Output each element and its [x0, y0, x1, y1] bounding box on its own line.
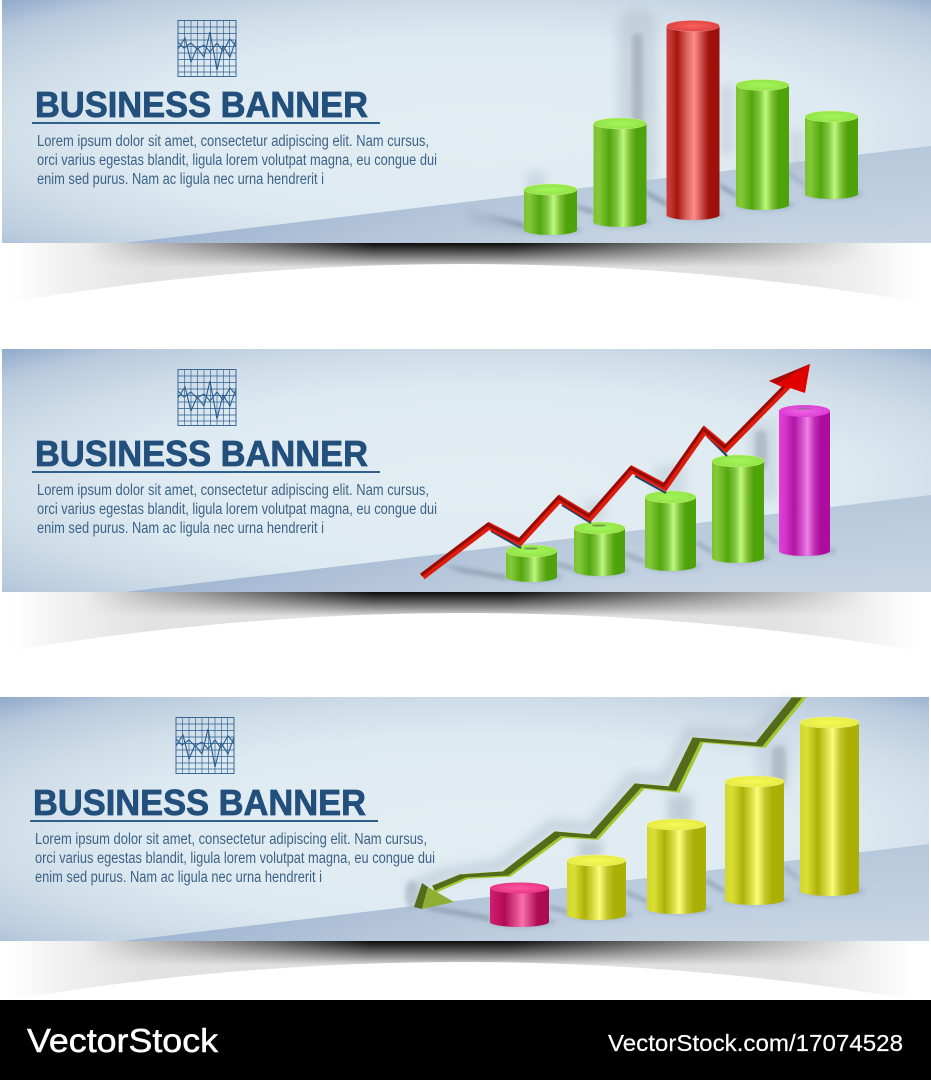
banner 3 drop shadow: [38, 941, 886, 995]
bar 4 green: [712, 455, 770, 564]
footer bar: [0, 1000, 931, 1080]
bar 2 green: [592, 118, 652, 228]
body text: enim sed purus. Nam ac ligula nec urna hendrerit i: [35, 869, 322, 886]
banner 1 background: [2, 0, 931, 243]
banner 3 cast shadows: [405, 700, 800, 921]
body text: [35, 831, 435, 886]
body text: orci varius egestas blandit, ligula lorem volutpat magna, eu congue dui: [37, 501, 437, 518]
body text: enim sed purus. Nam ac ligula nec urna hendrerit i: [37, 171, 324, 188]
banner 1 drop shadow: [40, 243, 888, 297]
banner 3 floor: [123, 844, 929, 941]
bar 2 yellow: [565, 855, 633, 921]
VectorStock logo: VectorStock: [27, 1022, 219, 1059]
bar 3 green: [644, 491, 702, 572]
green arrow pointing down-left: [414, 698, 805, 909]
heading: BUSINESS BANNER: [35, 433, 368, 474]
chart icon: [178, 20, 236, 76]
bar 1 green: [522, 184, 582, 236]
red rising arrow: [421, 364, 810, 576]
banner 3: [0, 697, 929, 1000]
body text: Lorem ipsum dolor sit amet, consectetur adipiscing elit. Nam cursus,: [35, 831, 427, 848]
bar 3 yellow: [645, 819, 713, 915]
body text: Lorem ipsum dolor sit amet, consectetur adipiscing elit. Nam cursus,: [37, 133, 429, 150]
banner 2 floor: [125, 495, 931, 592]
banner 1 cast shadows: [466, 10, 806, 232]
bar 1 green: [505, 545, 563, 583]
bar 5 green: [804, 111, 864, 200]
heading underline: [30, 820, 378, 822]
heading underline: [32, 471, 380, 473]
body text: [37, 133, 437, 188]
body text: Lorem ipsum dolor sit amet, consectetur adipiscing elit. Nam cursus,: [37, 482, 429, 499]
chart icon: [176, 718, 234, 774]
banner 2 cast shadows: [445, 420, 779, 580]
heading underline: [32, 122, 380, 124]
banner 2: [2, 349, 931, 651]
banner 1 floor: [125, 146, 931, 243]
image id url: VectorStock.com/17074528: [608, 1030, 903, 1056]
body text: [37, 482, 437, 537]
bar 3 red: [665, 20, 725, 221]
body text: orci varius egestas blandit, ligula lorem volutpat magna, eu congue dui: [37, 152, 437, 169]
heading: BUSINESS BANNER: [35, 84, 368, 125]
body text: enim sed purus. Nam ac ligula nec urna hendrerit i: [37, 520, 324, 537]
banner 2 drop shadow: [40, 592, 888, 646]
body text: orci varius egestas blandit, ligula lorem volutpat magna, eu congue dui: [35, 850, 435, 867]
bar 2 green: [573, 522, 631, 577]
bar 5 yellow: [798, 717, 866, 897]
bar 4 yellow: [723, 776, 791, 906]
heading: BUSINESS BANNER: [33, 782, 366, 823]
banner 2 background: [2, 349, 931, 592]
banner 1: [2, 0, 931, 302]
banner 3 background: [0, 697, 929, 941]
chart icon: [178, 370, 236, 426]
bar 4 green: [735, 80, 795, 211]
bar 5 purple: [779, 405, 837, 557]
bar 1 pink: [488, 882, 556, 928]
